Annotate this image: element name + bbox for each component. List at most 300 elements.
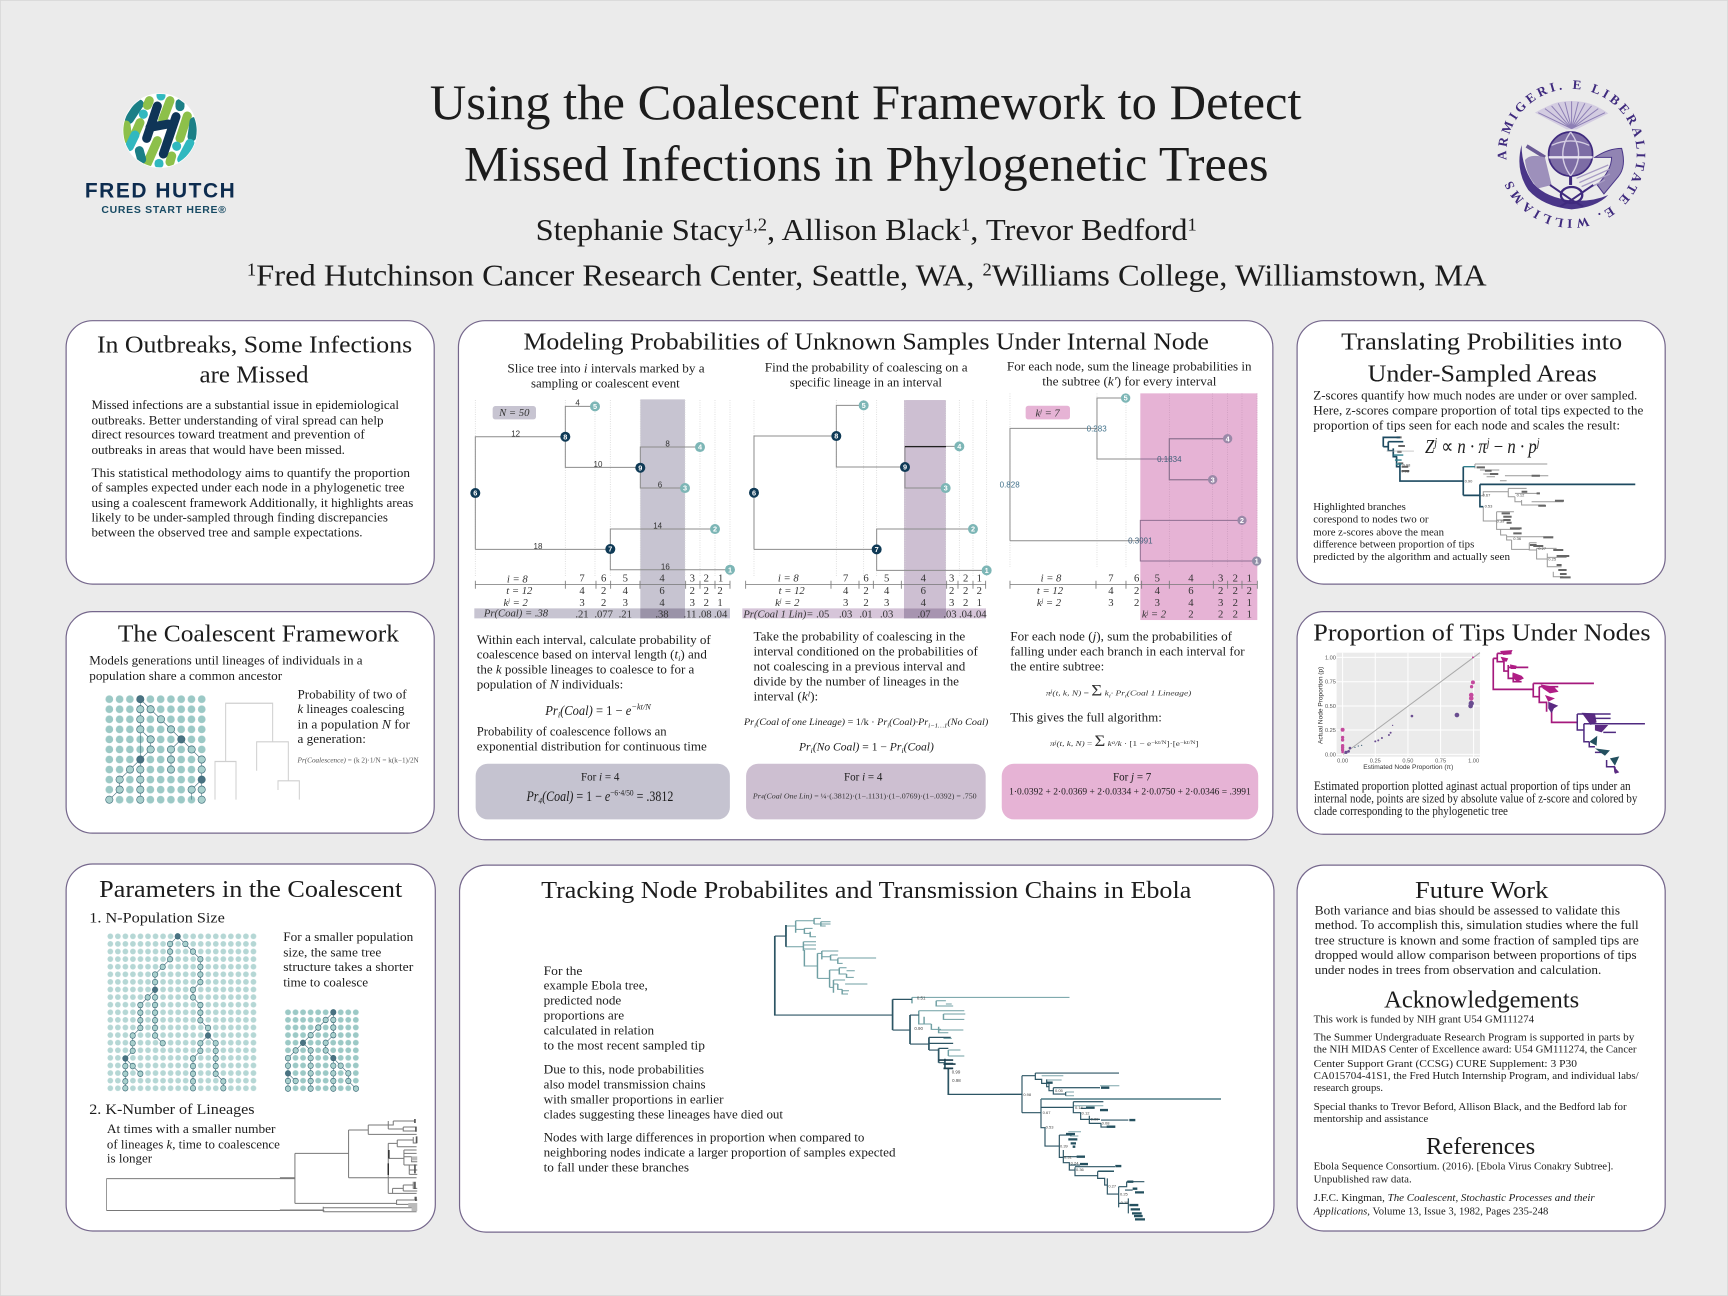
diagram: tree 3: 2 [1218, 610, 1223, 621]
diagram: tree 3: j [1041, 599, 1044, 605]
diagram: tree 1: 4 [579, 586, 585, 597]
diagram: tree 1: Pr(Coal) = .38 [483, 609, 549, 620]
caption [1314, 779, 1637, 818]
diagram: tree 2: 2 [971, 525, 975, 534]
diagram: tree 2: 2 [863, 598, 869, 609]
phylogenetic tree: Ebola lower: 0.27 [1108, 1183, 1117, 1188]
diagram: tree 1: 1 [728, 565, 732, 574]
diagram: tree 1: j [507, 599, 510, 605]
diagram: tree 3: 2 [1134, 586, 1139, 597]
diagram: tree 3: 2 [1240, 516, 1244, 525]
text block: neighboring nodes indicate a larger proportion of samples expected [544, 1146, 896, 1160]
formula: π [1046, 688, 1082, 697]
diagram: tree 2: 7 [875, 545, 879, 554]
formula: n · π [1457, 435, 1490, 458]
formula: i [901, 746, 904, 755]
tree node labels: Ebola middle: 0.99 [952, 1070, 961, 1075]
formula: (Coal of one Lineage) [756, 717, 845, 728]
tree node labels: Ebola middle [914, 996, 961, 1083]
formula: j [1485, 435, 1490, 449]
diagram: tree 1: 8 [563, 432, 567, 441]
text block: of samples expected under each node in a phylogenetic tree [91, 481, 404, 495]
heading: are Missed [199, 361, 309, 388]
formula: n · p [1507, 435, 1540, 458]
logo: Fred Hutch [85, 93, 235, 216]
formula: = Σ k [1083, 682, 1108, 699]
callout: i=4 lineage [746, 764, 986, 819]
scatter plot: 0.75 [1325, 680, 1336, 686]
diagram: tree 3: j [1039, 409, 1042, 415]
text block: Unpublished raw data. [1314, 1174, 1412, 1185]
text block: outbreaks in areas that would have been missed. [91, 443, 345, 457]
diagram: tree 3: 4 [1188, 574, 1194, 585]
diagram: tree 1: 2 [601, 598, 606, 609]
diagram: tree 3: 1 [1255, 557, 1259, 566]
heading: Proportion of Tips Under Nodes [1313, 620, 1651, 647]
text column 1: Within each interval, calculate probability of [477, 633, 712, 647]
formula: j [1433, 435, 1438, 449]
subheading column 2: Find the probability of coalescing on a [765, 361, 968, 375]
diagram: tree 1: 18 [534, 542, 543, 551]
scatter plot [1318, 653, 1480, 771]
text block [1313, 502, 1511, 563]
diagram: tree 3: 0.3991 [1128, 537, 1153, 546]
phylogenetic tree: Ebola lower: 0.15 [1121, 1200, 1129, 1205]
diagram: tree 1: 1 [718, 574, 723, 585]
formula: − [1490, 436, 1507, 458]
diagram: tree 2: 6 [863, 574, 869, 585]
diagram: tree 3: 2 [1233, 586, 1238, 597]
diagram: tree 2: 5 [862, 401, 866, 410]
formula: /k [1114, 739, 1122, 748]
text block [91, 398, 414, 540]
text block: clades suggesting these lineages have died out [544, 1107, 784, 1121]
text block: Nodes with large differences in proportion when compared to [544, 1131, 864, 1145]
text block: This work is funded by NIH grant U54 GM111274 [1314, 1015, 1535, 1026]
diagram: tree 2: 1 [977, 574, 982, 585]
caption: Estimated proportion plotted aginast actual proportion of tips under an [1314, 779, 1631, 793]
diagram: tree 1: 8 [665, 439, 670, 448]
diagram: tree 3: 3 [1218, 574, 1223, 585]
text column 1: i [678, 654, 680, 663]
formula: (No Coal) [813, 742, 860, 754]
panel: Future Work [1297, 865, 1665, 1231]
subheading column 3: For each node, sum the lineage probabilities in [1007, 360, 1252, 374]
formula: (No Coal) [947, 717, 988, 728]
text block: Z-scores quantify how much nodes are under or over sampled. [1313, 388, 1637, 402]
text column 3: falling under each branch in each interval for [1010, 644, 1245, 658]
diagram: tree 1: 4 [575, 398, 580, 407]
diagram: tree 2: 3 [843, 598, 848, 609]
diagram: tree 1: 3 [579, 598, 585, 609]
diagram: tree 2: 5 [884, 574, 889, 585]
diagram: tree 1: 14 [653, 521, 663, 530]
phylogenetic tree: Ebola lower: 0.25 [1120, 1192, 1129, 1197]
logo wordmark: FRED HUTCH [85, 179, 235, 202]
logo: Williams College seal: ARMIGERI. E LIBERALITATE E. WILLIAMS [1498, 80, 1646, 228]
diagram: tree 3: 0.828 [1000, 481, 1020, 490]
diagram: tree 3: 1 [1247, 574, 1252, 585]
diagram: tree 2: 2 [963, 598, 968, 609]
diagram: tree 2: .03 [839, 609, 852, 620]
diagram: tree 2: 2 [963, 574, 968, 585]
phylogenetic tree: Ebola lower: 0.24 [1071, 1160, 1079, 1165]
text block: Ebola Sequence Consortium. (2016). [Ebola Virus Conakry Subtree]. [1314, 1161, 1613, 1172]
diagram: tree 3: i = 8 [1041, 574, 1062, 585]
subheading column 1: sampling or coalescent event [531, 376, 680, 390]
text column 2 [743, 630, 988, 755]
panel: In Outbreaks [66, 321, 434, 584]
text block: Missed infections are a substantial issue in epidemiological [91, 398, 400, 412]
diagram: tree 1: 12 [511, 429, 521, 438]
text column 1: Probability of coalescence follows an [477, 725, 667, 739]
phylogenetic tree: Ebola lower: 0.14 [1075, 1105, 1084, 1110]
diagram: tree 2: 1 [977, 598, 982, 609]
diagram: tree 2: k [775, 598, 780, 609]
heading: The Coalescent Framework [118, 620, 400, 647]
formula: = 1 − Pr [862, 742, 901, 754]
phylogenetic tree: highlighted [1383, 437, 1635, 577]
formula: (t, k, N) [1052, 688, 1082, 697]
callout: i=4 coal: For i = 4 [581, 772, 620, 784]
diagram: tree 2: 3 [944, 484, 948, 493]
title [430, 75, 1302, 192]
text block: population share a common ancestor [89, 669, 282, 683]
formula: = 1 − e [596, 703, 632, 718]
diagram: tree 3: 6 [1188, 586, 1194, 597]
affiliations: 1 [247, 260, 256, 280]
subheading: 2. K-Number of Lineages [89, 1102, 255, 1118]
diagram: tree 3: 2 [1218, 586, 1223, 597]
diagram: tree 3: 3 [1211, 475, 1215, 484]
text block: tree structure is known and some fraction of sampled tips are [1315, 933, 1639, 947]
phylogenetic tree: colored clades [1493, 650, 1645, 774]
panel: The Coalescent Framework [66, 612, 434, 833]
diagram: tree 3: 4 [1108, 586, 1114, 597]
text column 2: interval conditioned on the probabilities of [753, 644, 979, 658]
text block [1313, 1161, 1613, 1217]
heading [97, 332, 412, 388]
diagram: tree 3: 3 [1218, 598, 1223, 609]
diagram: tree 1: .21 [575, 609, 589, 620]
text block: predicted by the algorithm and actually seen [1313, 552, 1511, 563]
diagram: tree 1 [470, 398, 735, 620]
diagram: tree 1: .04 [714, 609, 728, 620]
diagram: tree 2: .04 [959, 609, 973, 620]
text block: corespond to nodes two or [1313, 515, 1429, 526]
diagram: tree 2: i = 8 [778, 574, 799, 585]
panel: Tracking Node Probabilities [460, 865, 1274, 1232]
seal: emblem [1519, 145, 1623, 209]
diagram: tree 1: k [504, 598, 508, 609]
diagram: tree 2: .03 [880, 609, 893, 620]
tree node labels: Ebola middle: 0.51 [917, 996, 926, 1001]
formula: π [1050, 739, 1085, 748]
diagram: tree 2: 7 [843, 574, 849, 585]
text column 3: For each node ( j), sum the probabilities of [1010, 630, 1233, 644]
callout: j=7: 1·0.0392 + 2·0.0369 + 2·0.0334 + 2·0.0750 + 2·0.0346 = .3991 [1009, 787, 1251, 798]
diagram: tree 2: 8 [834, 432, 838, 441]
seal: rays [1535, 101, 1608, 129]
callout: i=4 coal: 4 [538, 795, 543, 805]
diagram: tree 3: 2 [1233, 574, 1238, 585]
diagram: tree 1: 6 [601, 574, 607, 585]
text block: The Summer Undergraduate Research Program is supported in parts by [1314, 1032, 1635, 1043]
callout: i=4 coal: Pr [526, 789, 574, 805]
diagram: tree 3: = 2 [1148, 610, 1167, 621]
formula: Pr [544, 703, 593, 719]
diagram: tree 2: j [779, 599, 782, 605]
panel: Modeling Probabilities [458, 321, 1273, 840]
text block: predicted node [544, 994, 621, 1008]
formula: −kt/N [1151, 740, 1167, 746]
phylogenetic tree: Ebola lower: 0.67 [1043, 1110, 1051, 1115]
phylogenetic tree: highlighted: 0.90 [1465, 478, 1473, 483]
text column 1: exponential distribution for continuous time [477, 740, 707, 754]
formula: i [1125, 694, 1127, 700]
scatter plot: 0.50 [1402, 759, 1413, 765]
text column 1: ) and [680, 648, 707, 662]
diagram: tree 1: 4 [659, 598, 665, 609]
formula: i [887, 722, 889, 729]
text block: the NIH MIDAS Center of Excellence award: U54 GM111274, the Cancer [1314, 1044, 1637, 1055]
diagram: tree 1: i = 8 [507, 574, 528, 585]
text block [283, 930, 413, 989]
subheading column 3: the subtree ( k') for every interval [1042, 375, 1217, 389]
diagram: tree 3: 1 [1247, 610, 1252, 621]
text column 1: population of N individuals: [477, 678, 623, 692]
scatter plot: 0.00 [1337, 759, 1348, 765]
diagram: tree 1: 4 [659, 574, 665, 585]
text block: structure takes a shorter [283, 960, 413, 974]
diagram: tree 2: Pr(Coal 1 Lin)= .05 [742, 609, 829, 620]
scatter plot: 0.75 [1435, 759, 1446, 765]
callout: j=7: For j = 7 [1113, 772, 1152, 784]
panel: Translating Probabilities [1297, 321, 1665, 584]
text column 3: This gives the full algorithm: [1010, 710, 1162, 724]
phylogenetic tree: Ebola lower: 0.31 [1064, 1155, 1073, 1160]
formula: (Coal) [904, 742, 934, 754]
text block: Due to this, node probabilities [544, 1062, 704, 1076]
callout: i=4 coal: = .3812 [634, 789, 673, 805]
heading: Modeling Probabilities of Unknown Samples Under Internal Node [523, 328, 1209, 355]
diagram: tree 1: 5 [623, 574, 628, 585]
diagram: tree 2: 2 [863, 586, 869, 597]
text block [1315, 904, 1639, 977]
caption: internal node, points are sized by absolute value of z-score and colored by [1314, 791, 1637, 805]
phylogenetic tree: Ebola lower: 0.98 [1023, 1092, 1032, 1097]
text block: proportions are [544, 1009, 624, 1023]
diagram: tree 3: k [1036, 408, 1040, 419]
formula: Pr [798, 742, 860, 755]
logo tagline: CURES START HERE® [101, 205, 226, 216]
formula: · Pr [1111, 688, 1126, 697]
diagram: tree 1: 4 [623, 586, 629, 597]
text block: size, the same tree [283, 946, 381, 960]
text block [1314, 1015, 1639, 1125]
text block: Models generations until lineages of individuals in a [89, 654, 363, 668]
diagram: tree 3: t = 12 [1037, 586, 1064, 597]
formula: j [1535, 435, 1540, 449]
text block [89, 654, 363, 683]
formula: −kt/N [631, 702, 652, 712]
phylogenetic tree: Ebola lower: 0.05 [1055, 1088, 1064, 1093]
text block: For a smaller population [283, 930, 413, 944]
text block: using a coalescent framework Additionally, it highlights areas [91, 496, 414, 510]
phylogenetic tree: highlighted: 0.53 [1485, 504, 1493, 509]
diagram: tree 1: 5 [593, 402, 597, 411]
formula: ]·[e [1167, 739, 1181, 748]
callout: i=4 lineage: For i = 4 [844, 772, 883, 784]
diagram: tree 2: 4 [884, 586, 890, 597]
diagram: tree 3: 2 [1247, 586, 1252, 597]
formula: i [754, 722, 756, 729]
diagram: tree 3: 4 [1155, 586, 1161, 597]
phylogenetic tree: Ebola lower: 0.53 [1046, 1124, 1054, 1129]
diagram: tree 3: 6 [1134, 574, 1140, 585]
phylogenetic tree: Ebola upper [775, 918, 1069, 1094]
text block: CA015704-41S1, the Fred Hutch Internship Program, and individual labs/ [1314, 1071, 1639, 1082]
text block: under nodes in trees from observation and calculation. [1315, 963, 1601, 977]
text block: Highlighted branches [1313, 502, 1406, 513]
diagram: tree 3: k [1142, 610, 1147, 621]
subheading column 3 [1007, 360, 1252, 389]
diagram: tree 1: .11 [684, 609, 696, 620]
formula: i [1109, 694, 1111, 700]
phylogenetic tree: Ebola lower [1000, 1073, 1221, 1219]
text block: proportion of tips seen for each node and scales the result: [1313, 418, 1620, 432]
scatter plot: 0.50 [1325, 704, 1336, 710]
text block: mentorship and assistance [1314, 1114, 1429, 1125]
diagram: tree 1: = 2 [510, 598, 528, 609]
diagram: tree 1: .077 [594, 609, 614, 620]
callout: j=7 [1002, 764, 1258, 819]
diagram: tree 2: 4 [957, 442, 962, 451]
authors: 1 [1188, 214, 1197, 234]
authors: , Allison Black [767, 213, 962, 247]
text block: Applications, Volume 13, Issue 3, 1982, Pages 235-248 [1313, 1206, 1548, 1217]
diagram: tree 3: 0.1834 [1157, 455, 1182, 464]
diagram: tree 2: 3 [949, 574, 954, 585]
text: probability: k lineages coalescing [298, 702, 404, 716]
diagram: tree 2: 4 [843, 586, 849, 597]
formula: (Coal 1 Lineage) [1127, 688, 1192, 697]
dot grid: small population [284, 1008, 360, 1092]
diagram: tree 2: = 2 [782, 598, 800, 609]
diagram: tree 1: .08 [698, 609, 712, 620]
title: Missed Infections in Phylogenetic Trees [464, 137, 1268, 192]
formula: a [1112, 740, 1115, 746]
diagram: tree 1: 10 [594, 460, 603, 469]
heading [1341, 328, 1622, 387]
text block: At times with a smaller number [107, 1122, 276, 1136]
diagram: tree 3: 4 [1226, 434, 1231, 443]
subheading column 2: specific lineage in an interval [790, 376, 943, 390]
diagram: tree 1: 2 [713, 525, 717, 534]
text: probability: a generation: [298, 732, 366, 746]
phylogenetic tree: highlighted: 0.25 [1548, 557, 1557, 562]
diagram: tree 1: .21 [619, 609, 632, 620]
diagram: tree 1: 3 [623, 598, 628, 609]
phylogenetic tree: Ebola lower: 0.39 [1060, 1143, 1069, 1148]
formula: · [1 − e [1124, 739, 1146, 748]
text block: also model transmission chains [544, 1077, 706, 1091]
phylogenetic tree: highlighted: 0.27 [1538, 546, 1547, 551]
affiliations: Williams College, Williamstown, MA [992, 258, 1487, 292]
scatter plot: 1.00 [1325, 655, 1336, 661]
diagram: tree 1: 7 [579, 574, 585, 585]
diagram: tree 2: 4 [921, 574, 927, 585]
text block: Center Support Grant (CCSG) CURE Supplement: 3 P30 [1314, 1059, 1577, 1070]
formula: (t, k, N) [1056, 739, 1085, 748]
phylogenetic tree: Ebola lower: 0.09 [1091, 1117, 1099, 1122]
diagram: tree 2: 9 [903, 463, 907, 472]
authors: 1 [961, 214, 970, 234]
diagram: tree 1: 6 [659, 586, 665, 597]
diagram: tree 2: .03 [943, 609, 957, 620]
phylogenetic tree: lineages root [107, 1179, 324, 1210]
text block: difference between proportion of tips [1313, 540, 1474, 551]
text block [1313, 388, 1643, 432]
diagram: tree 1: 7 [608, 545, 612, 554]
text block: time to coalesce [283, 975, 368, 989]
text block: outbreaks. Better understanding of viral spread can help [91, 413, 384, 427]
phylogenetic tree: highlighted: 0.98 [1401, 469, 1410, 474]
diagram: tree 3: 1 [1247, 598, 1252, 609]
diagram: tree 2: .07 [917, 609, 931, 620]
text block: dropped would allow comparison between proportions of tips [1315, 948, 1637, 962]
text block: example Ebola tree, [544, 979, 648, 993]
text: probability [298, 688, 410, 746]
formula: i−1…1 [928, 722, 947, 729]
icon: Fred Hutch circle of pills [123, 93, 197, 168]
title: Using the Coalescent Framework to Detect [430, 75, 1302, 130]
callout: i=4 coal [476, 764, 730, 819]
text block: calculated in relation [544, 1024, 654, 1038]
formula: ] [1195, 739, 1198, 748]
phylogenetic tree: Ebola lower: 0.12 [1082, 1111, 1090, 1116]
text block: For the [544, 964, 582, 978]
diagram: tree 1: 2 [601, 586, 606, 597]
callout: i=4 coal: −6·4/50 [610, 788, 634, 798]
diagram: tree 3: 3 [1108, 598, 1114, 609]
formula: ∝ [1437, 436, 1457, 458]
subheading: 1. N-Population Size [89, 910, 225, 926]
phylogenetic tree: highlighted: 0.36 [1513, 536, 1522, 541]
text column 3 [1010, 630, 1245, 750]
scatter plot: 0.25 [1370, 759, 1381, 765]
formula: Pr [743, 717, 845, 729]
diagram: tree 1: 3 [690, 574, 695, 585]
text block: method. To accomplish this, simulation studies where the full [1315, 918, 1639, 932]
diagram: tree 3: 5 [1124, 394, 1128, 403]
text: probability: Probability of two of [298, 688, 408, 702]
diagram: tree 2: 4 [921, 598, 927, 609]
text block: between the observed tree and sample expectations. [91, 526, 363, 540]
seal: globe [1549, 132, 1593, 185]
panel: Proportion of Tips [1297, 612, 1665, 834]
formula: = 1/k · Pr [848, 717, 887, 728]
text column 2: Take the probability of coalescing in the [753, 630, 965, 644]
formula: (Coal)·Pr [889, 717, 928, 728]
text column 1: the k possible lineages to coalesce to for a [477, 663, 695, 677]
text block [544, 964, 896, 1175]
text column 2: l [808, 689, 810, 698]
formula: Z [1425, 435, 1438, 458]
formula: −kt/N [1180, 740, 1195, 746]
affiliations: Fred Hutchinson Cancer Research Center, Seattle, WA, [256, 258, 983, 292]
phylogenetic tree: highlighted: 0.67 [1483, 493, 1491, 498]
